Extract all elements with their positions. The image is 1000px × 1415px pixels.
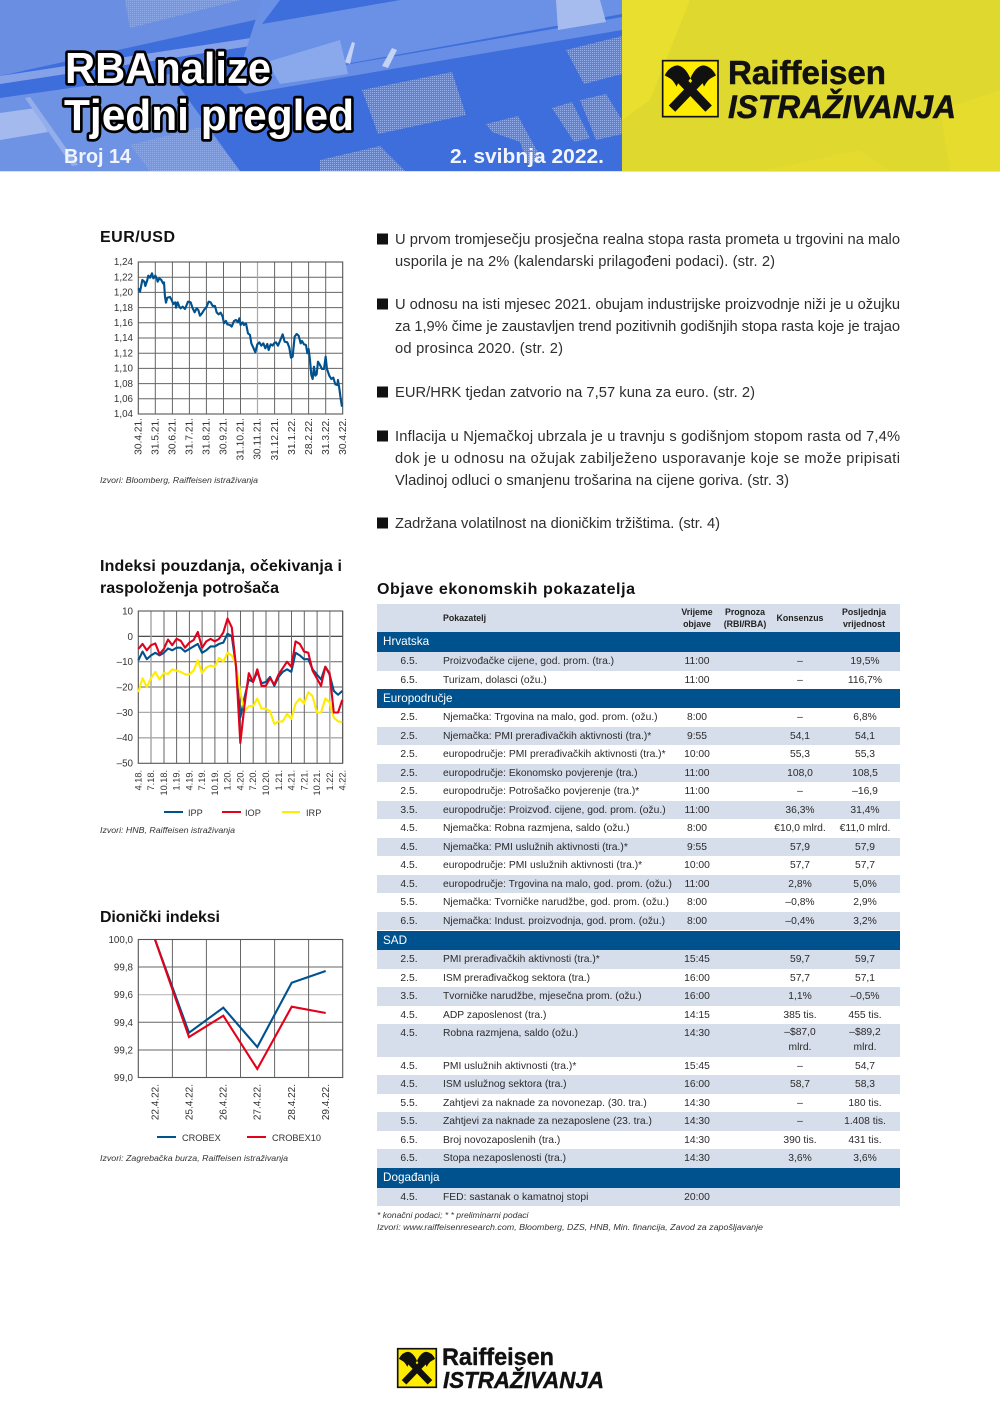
row: – — [797, 1060, 803, 1072]
row: 14:30 — [684, 1153, 710, 1164]
row: 31,4% — [850, 804, 880, 816]
row: 2.5. — [400, 749, 418, 760]
chart: IPP IOP IRP indices: –50 — [117, 758, 134, 770]
row: Proizvođačke cijene, god. prom. (tra.) — [443, 656, 614, 667]
row — [400, 786, 878, 797]
chart: stock indices: 27.4.22. — [253, 1084, 264, 1120]
chart: EUR/USD line: 1,04 — [114, 409, 134, 420]
chart: stock indices: 22.4.22. — [150, 1084, 162, 1120]
row: Njemačka: PMI uslužnih aktivnosti (tra.)* — [443, 842, 628, 852]
chart: IPP IOP IRP indices: 10.20. — [261, 770, 271, 796]
chart: IPP IOP IRP indices: 4.18. — [133, 770, 143, 790]
row — [400, 674, 882, 686]
table header row: vrijednost — [843, 619, 885, 629]
row: 6.5. — [400, 656, 418, 667]
row: 108,5 — [852, 768, 878, 778]
source: stock indices: Izvori: Zagrebačka burza, Raiffeisen istraživanja — [100, 1153, 288, 1163]
row: 2.5. — [400, 972, 418, 984]
row: 108,0 — [787, 768, 813, 778]
icon: crossed horse heads footer — [398, 1349, 436, 1387]
chart: IPP IOP IRP indices: 0 — [128, 632, 134, 643]
logo: Raiffeisen Istraživanja header: ISTRAŽIVANJA — [728, 89, 956, 125]
row: europodručje: PMI prerađivačkih aktivnosti (tra.)* — [443, 749, 666, 760]
row — [400, 749, 875, 760]
heading: confidence indices: raspoloženja potrošača — [100, 580, 279, 597]
row — [400, 897, 877, 908]
chart: EUR/USD line: 31.1.22. — [287, 418, 298, 455]
row — [377, 1024, 900, 1056]
row: 116,7% — [848, 674, 882, 686]
section: Europodručje — [377, 688, 900, 708]
row: 15:45 — [684, 954, 710, 965]
row: 11:00 — [684, 656, 710, 667]
row: 6.5. — [400, 674, 418, 686]
chart: EUR/USD line: 30.9.21. — [219, 418, 230, 455]
row: 4.5. — [400, 842, 418, 852]
chart: EUR/USD line: 31.8.21. — [202, 418, 213, 455]
bullet: industrial production: za 1,9% čime je zaustavljen trend pozitivnih godišnjih stopa rasta koje je trajao — [395, 319, 900, 335]
row: 4.5. — [400, 878, 418, 890]
row: – — [797, 674, 803, 686]
chart: EUR/USD line: 30.11.21. — [253, 418, 264, 460]
row: –0,5% — [850, 991, 880, 1002]
row: 10:00 — [684, 749, 710, 760]
legend: indices: IOP — [245, 808, 261, 818]
source: table: Izvori: www.raiffeisenresearch.com, Bloomberg, DZS, HNB, Min. financija, Zavod za zapošljavanje — [377, 1222, 763, 1232]
chart: IPP IOP IRP indices: 1.19. — [172, 770, 182, 790]
row: 4.5. — [400, 860, 418, 871]
row: – — [797, 712, 803, 723]
row: Njemačka: Tvorničke narudžbe, god. prom. (ožu.) — [443, 897, 669, 908]
chart: stock indices: 25.4.22. — [185, 1084, 196, 1120]
row: Zahtjevi za naknade za novonezap. (30. tra.) — [443, 1098, 647, 1108]
legend: stock indices: CROBEX10 — [272, 1133, 321, 1143]
chart: stock indices: 99,8 — [114, 962, 134, 974]
row: 54,1 — [790, 730, 810, 742]
chart: IPP IOP IRP indices — [116, 606, 348, 818]
chart: EUR/USD line: 31.3.22. — [321, 418, 332, 455]
row: 2.5. — [400, 954, 418, 965]
chart: IPP IOP IRP indices: 7.21. — [299, 770, 309, 790]
row — [400, 1098, 882, 1108]
row: 58,7 — [790, 1079, 810, 1090]
row: 16:00 — [684, 991, 710, 1002]
chart: IPP IOP IRP indices: –20 — [117, 682, 134, 694]
row: –$87,0 — [784, 1027, 816, 1038]
row: 2.5. — [400, 786, 418, 797]
row: 14:30 — [684, 1098, 710, 1108]
chart: stock indices — [108, 935, 344, 1143]
section: Hrvatska — [377, 632, 900, 652]
row — [400, 1134, 882, 1146]
section: Hrvatska: Hrvatska — [383, 635, 429, 648]
row: 180 tis. — [848, 1098, 882, 1108]
row: Stopa nezaposlenosti (tra.) — [443, 1153, 566, 1164]
row: 20:00 — [684, 1192, 710, 1202]
chart: IPP IOP IRP indices: 4.21. — [286, 770, 296, 790]
chart: IPP IOP IRP indices: 1.22. — [325, 770, 335, 790]
header banner — [0, 0, 1000, 172]
row: ADP zaposlenost (tra.) — [443, 1010, 546, 1020]
chart: stock indices: 99,4 — [114, 1018, 134, 1029]
row — [377, 1188, 900, 1206]
row: 3,6% — [853, 1153, 877, 1164]
row: –$89,2 — [849, 1027, 881, 1038]
row: 10:00 — [684, 860, 710, 871]
row: 11:00 — [684, 786, 710, 797]
row: 8:00 — [687, 916, 707, 926]
chart: stock indices: 99,2 — [114, 1046, 133, 1056]
chart: IPP IOP IRP indices: 10.18. — [159, 770, 169, 796]
row: 1,1% — [788, 991, 812, 1002]
row — [400, 1060, 875, 1072]
row: 15:45 — [684, 1060, 710, 1072]
row: europodručje: Trgovina na malo, god. prom. (ožu.) — [443, 878, 672, 890]
row: – — [797, 786, 803, 797]
table header row: objave — [683, 619, 711, 629]
chart: stock indices: 100,0 — [108, 935, 134, 946]
row: europodručje: PMI uslužnih aktivnosti (tra.)* — [443, 860, 642, 871]
section: SAD: SAD — [383, 934, 407, 946]
row: 14:15 — [684, 1010, 710, 1020]
row: 57,7 — [790, 972, 810, 984]
chart: IPP IOP IRP indices: –40 — [117, 733, 134, 744]
source: EUR/USD: Izvori: Bloomberg, Raiffeisen istraživanja — [100, 475, 258, 485]
row: €11,0 mlrd. — [840, 823, 890, 834]
chart: IPP IOP IRP indices: 10.19. — [210, 770, 220, 796]
bullet: retail sales: usporila je na 2% (kalendarski prilagođeni podaci). (str. 2) — [395, 254, 775, 270]
row: Njemačka: PMI prerađivačkih aktivnosti (tra.)* — [443, 730, 651, 742]
chart: stock indices: 28.4.22. — [287, 1084, 298, 1120]
section: Europodručje: Europodručje — [383, 692, 453, 704]
row: – — [797, 656, 803, 667]
row: mlrd. — [789, 1042, 811, 1052]
row: 8:00 — [687, 823, 707, 834]
chart: EUR/USD line: 1,10 — [114, 364, 134, 374]
row: 55,3 — [855, 749, 875, 760]
chart: stock indices: 26.4.22. — [219, 1084, 230, 1120]
logo: Raiffeisen Istraživanja header — [662, 54, 956, 125]
row: 11:00 — [684, 804, 710, 816]
row: 431 tis. — [848, 1134, 882, 1146]
row: 9:55 — [687, 730, 707, 742]
row: 9:55 — [687, 842, 707, 852]
chart: EUR/USD line: 1,06 — [114, 394, 134, 405]
chart: EUR/USD line: 30.4.22. — [338, 418, 349, 455]
row: Njemačka: Robna razmjena, saldo (ožu.) — [443, 823, 630, 834]
row: 5.5. — [400, 897, 418, 908]
chart: EUR/USD line: 30.6.21. — [168, 418, 179, 455]
bullet: inflation in Germany: dok je u odnosu na ožujak zabilježeno usporavanje koje se može pripisati — [395, 451, 900, 467]
row: –0,4% — [785, 916, 815, 926]
chart: EUR/USD line: 1,22 — [114, 272, 133, 284]
legend: indices: IRP — [306, 808, 321, 818]
row: europodručje: Proizvođ. cijene, god. prom. (ožu.) — [443, 804, 666, 816]
row: 385 tis. — [783, 1010, 817, 1020]
row: Zahtjevi za naknade za nezaposlene (23. tra.) — [443, 1116, 652, 1127]
row: europodručje: Potrošačko povjerenje (tra.)* — [443, 786, 639, 797]
chart: IPP IOP IRP indices: –10 — [117, 657, 134, 668]
row: ISM prerađivačkog sektora (tra.) — [443, 972, 590, 984]
chart: EUR/USD line: 31.7.21. — [185, 418, 196, 455]
row: 2.5. — [400, 768, 418, 778]
row: 6.5. — [400, 1134, 418, 1146]
row: – — [797, 1116, 803, 1127]
row: 4.5. — [400, 823, 418, 834]
row: 16:00 — [684, 972, 710, 984]
row: 4.5. — [400, 1010, 418, 1020]
chart: EUR/USD line — [114, 257, 349, 460]
chart: EUR/USD line: 1,20 — [114, 288, 134, 298]
chart: EUR/USD line: 1,14 — [114, 333, 134, 344]
row: mlrd. — [854, 1042, 876, 1052]
key points list — [377, 232, 900, 532]
row — [377, 912, 900, 930]
heading: confidence indices — [100, 558, 342, 597]
chart: stock indices: 29.4.22. — [321, 1084, 332, 1120]
logo: Raiffeisen Istraživanja footer — [396, 1344, 604, 1393]
chart: IPP IOP IRP indices: 7.19. — [197, 770, 207, 790]
table: economic indicators — [377, 604, 900, 1206]
row: 11:00 — [684, 878, 710, 890]
row: 3,2% — [853, 916, 877, 926]
chart: EUR/USD line: 1,16 — [114, 318, 134, 329]
row: 4.5. — [400, 1028, 418, 1039]
row: ISM uslužnog sektora (tra.) — [443, 1079, 567, 1090]
heading: confidence indices: Indeksi pouzdanja, očekivanja i — [100, 558, 342, 575]
chart: EUR/USD line: 1,24 — [114, 257, 134, 268]
row — [400, 972, 875, 984]
bullet: EUR/HRK: EUR/HRK tjedan zatvorio na 7,57 kuna za euro. (str. 2) — [395, 385, 755, 401]
chart: EUR/USD line: 1,12 — [114, 348, 133, 360]
bullet: stock market volatility: Zadržana volatilnost na dioničkim tržištima. (str. 4) — [395, 516, 720, 532]
chart: EUR/USD line: 31.10.21. — [236, 418, 247, 460]
row: Njemačka: Indust. proizvodnja, god. prom. (ožu.) — [443, 916, 665, 926]
row: 2.5. — [400, 712, 418, 723]
chart: EUR/USD line: 31.12.21. — [270, 418, 281, 460]
table header row — [377, 604, 900, 632]
section: SAD — [377, 930, 900, 950]
row — [377, 726, 900, 745]
table header row: Konsenzus — [777, 613, 823, 623]
row — [377, 1149, 900, 1168]
row: 6,8% — [853, 712, 877, 723]
row — [377, 874, 900, 893]
title: RBAnalize — [65, 44, 271, 93]
chart: IPP IOP IRP indices: 4.20. — [236, 770, 246, 790]
title: Tjedni pregled — [64, 91, 354, 140]
chart: EUR/USD line: 28.2.22. — [304, 418, 315, 455]
row: 5.5. — [400, 1098, 418, 1108]
chart: IPP IOP IRP indices: 1.20. — [223, 770, 233, 790]
legend: indices: IPP — [188, 808, 203, 818]
row — [400, 712, 877, 723]
bullet: industrial production: U odnosu na isti mjesec 2021. obujam industrijske proizvodnje niži je u ožujku — [395, 297, 900, 313]
row: 4.5. — [400, 1192, 418, 1202]
row: 54,7 — [855, 1060, 875, 1072]
row: 8:00 — [687, 897, 707, 908]
row: 11:00 — [684, 674, 710, 686]
chart: IPP IOP IRP indices: 4.22. — [338, 770, 348, 790]
bullet: retail sales — [377, 232, 900, 270]
row: 3,6% — [788, 1153, 812, 1164]
chart: EUR/USD line: 1,18 — [114, 303, 134, 314]
row: 4.5. — [400, 1079, 418, 1090]
row: Tvorničke narudžbe, mjesečna prom. (ožu.) — [443, 991, 642, 1002]
table header row: Pokazatelj — [443, 613, 486, 623]
legend: indices — [164, 808, 321, 818]
row: 57,9 — [855, 842, 875, 852]
row: 8:00 — [687, 712, 707, 723]
heading: EUR/USD: EUR/USD — [100, 229, 176, 246]
title — [62, 44, 354, 142]
legend: stock indices — [157, 1133, 321, 1143]
section: Događanja: Događanja — [383, 1171, 440, 1184]
chart: IPP IOP IRP indices: 10 — [122, 606, 134, 618]
row — [377, 1075, 900, 1094]
table header row: Vrijeme — [681, 607, 713, 617]
bullet: industrial production — [377, 297, 900, 357]
row: 16:00 — [684, 1079, 710, 1090]
bullet: inflation in Germany: Vladinoj odluci o smanjenu trošarina na cijene goriva. (str. 3) — [395, 473, 789, 489]
row — [400, 860, 875, 871]
logo: Raiffeisen Istraživanja footer: Raiffeisen — [442, 1344, 554, 1371]
heading: economic releases: Objave ekonomskih pokazatelja — [377, 581, 635, 598]
legend: stock indices: CROBEX — [182, 1133, 221, 1143]
row: 57,9 — [790, 842, 810, 852]
issue number: Broj 14 — [64, 146, 132, 168]
row: 6.5. — [400, 1153, 418, 1164]
row: 2,9% — [853, 897, 877, 908]
row: –16,9 — [852, 786, 878, 797]
row: 59,7 — [790, 954, 810, 965]
row — [377, 838, 900, 856]
row: –0,8% — [785, 897, 815, 908]
chart: EUR/USD line: 31.5.21. — [150, 418, 162, 455]
row: 390 tis. — [783, 1134, 817, 1146]
row — [377, 987, 900, 1006]
row: Turizam, dolasci (ožu.) — [443, 674, 547, 686]
table header row: (RBI/RBA) — [724, 619, 766, 629]
chart: IPP IOP IRP indices: –30 — [117, 708, 134, 719]
row — [377, 652, 900, 670]
row: 54,1 — [855, 730, 875, 742]
table header row: Prognoza — [725, 607, 765, 617]
row — [377, 950, 900, 968]
row — [377, 1112, 900, 1130]
chart: EUR/USD line: 30.4.21. — [134, 418, 144, 455]
row: Njemačka: Trgovina na malo, god. prom. (ožu.) — [443, 712, 658, 723]
row: 11:00 — [684, 768, 710, 778]
logo: Raiffeisen Istraživanja footer: ISTRAŽIVANJA — [443, 1366, 604, 1393]
row: 455 tis. — [848, 1010, 882, 1020]
row: PMI prerađivačkih aktivnosti (tra.)* — [443, 954, 600, 965]
section: Događanja — [377, 1168, 900, 1188]
chart: IPP IOP IRP indices: 4.19. — [184, 770, 194, 790]
row: 14:30 — [684, 1028, 710, 1039]
row: FED: sastanak o kamatnoj stopi — [443, 1192, 588, 1202]
bullet: retail sales: U prvom tromjesečju prosječna realna stopa rasta prometa u trgovini na malo — [395, 232, 900, 248]
row: €10,0 mlrd. — [774, 823, 826, 834]
chart: IPP IOP IRP indices: 7.18. — [146, 770, 156, 790]
row: 14:30 — [684, 1116, 710, 1127]
row: 36,3% — [785, 804, 815, 816]
footnote: data notes: * konačni podaci; * * preliminarni podaci — [377, 1210, 528, 1220]
row: 58,3 — [855, 1079, 875, 1090]
row: 59,7 — [855, 954, 875, 965]
row: 2.5. — [400, 730, 418, 742]
row: 5.5. — [400, 1116, 418, 1127]
row: europodručje: Ekonomsko povjerenje (tra.) — [443, 768, 638, 778]
row: 6.5. — [400, 916, 418, 926]
icon: crossed horse heads — [663, 61, 718, 117]
chart: EUR/USD line: 1,08 — [114, 379, 134, 390]
row: Robna razmjena, saldo (ožu.) — [443, 1028, 578, 1039]
row: 1.408 tis. — [844, 1116, 886, 1127]
chart: IPP IOP IRP indices: 10.21. — [312, 770, 322, 796]
row: – — [797, 1098, 803, 1108]
row: 3.5. — [400, 991, 418, 1002]
row: 55,3 — [790, 749, 810, 760]
row: Broj novozaposlenih (tra.) — [443, 1134, 560, 1146]
chart: stock indices: 99,6 — [114, 990, 134, 1001]
bullet: inflation in Germany: Inflacija u Njemačkoj ubrzala je u travnju s godišnjom stopom rasta od 7,4% — [395, 429, 900, 445]
row: 4.5. — [400, 1060, 418, 1072]
row — [400, 1010, 882, 1020]
row: 57,7 — [855, 860, 875, 871]
row: 2,8% — [788, 878, 812, 890]
row: 57,1 — [855, 972, 875, 984]
date: 2. svibnja 2022. — [450, 146, 604, 168]
table header row: Posljednja — [842, 607, 886, 617]
chart: stock indices: 99,0 — [114, 1073, 134, 1084]
row: 5,0% — [853, 878, 877, 890]
row — [400, 823, 890, 834]
heading: stock indices: Dionički indeksi — [100, 909, 220, 926]
chart: IPP IOP IRP indices: 7.20. — [248, 770, 258, 790]
row — [377, 764, 900, 782]
row: PMI uslužnih aktivnosti (tra.)* — [443, 1060, 576, 1072]
row: 19,5% — [850, 656, 880, 667]
source: indices: Izvori: HNB, Raiffeisen istraživanja — [100, 825, 235, 835]
row — [377, 800, 900, 819]
bullet: industrial production: od prosinca 2020. (str. 2) — [395, 341, 563, 357]
logo: Raiffeisen Istraživanja header: Raiffeisen — [728, 54, 886, 91]
row: 14:30 — [684, 1134, 710, 1146]
row: 3.5. — [400, 804, 418, 816]
row: 57,7 — [790, 860, 810, 871]
bullet: inflation in Germany — [377, 429, 900, 489]
chart: IPP IOP IRP indices: 1.21. — [274, 770, 284, 790]
